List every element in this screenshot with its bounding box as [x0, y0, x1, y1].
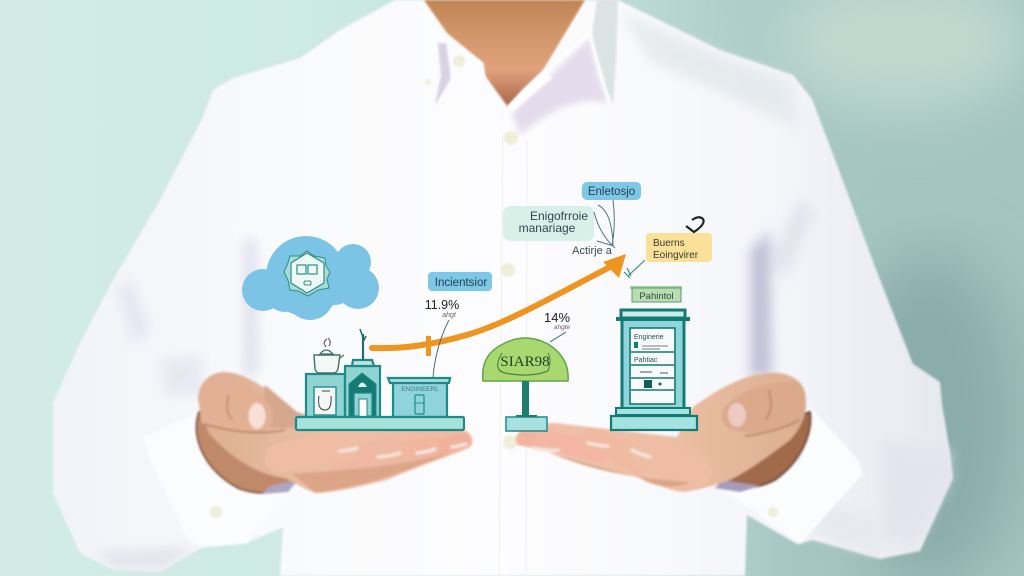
stat: 14%: ahgte	[554, 324, 571, 331]
box building	[388, 378, 450, 417]
label: Pahintol	[630, 286, 682, 302]
label: Buerns Eoingvirer: Eoingvirer	[653, 250, 699, 261]
connector lines	[594, 200, 615, 248]
stat: 11.9%	[425, 298, 459, 377]
shirt buttons	[210, 55, 778, 518]
stat: 11.9%: ahgt	[442, 312, 457, 319]
palm	[198, 372, 472, 493]
right hand	[515, 373, 810, 492]
label: Incientsior: Incientsior	[435, 277, 487, 289]
connector: yellow label	[624, 260, 645, 278]
thumbnail	[248, 403, 266, 429]
growth arrow	[372, 254, 626, 356]
label: Enletosjo: Enletosjo	[588, 186, 635, 198]
lower wrist	[196, 412, 296, 493]
cuff: right	[720, 404, 862, 544]
fingers	[280, 441, 464, 461]
palm	[515, 373, 806, 492]
lower wrist	[720, 412, 810, 488]
sign: SIAR98	[483, 338, 568, 431]
label: Incientsior	[428, 272, 492, 291]
label: Buerns Eoingvirer: Buerns	[653, 238, 685, 249]
label: Actirje a: Actirje a	[572, 245, 613, 257]
cloud with icon	[242, 236, 379, 320]
label: Pahintol: Pahintol	[639, 291, 674, 302]
platform	[296, 417, 464, 430]
neck	[424, 0, 585, 107]
icon: check mark	[686, 217, 704, 232]
tower panel: Pahtiac	[634, 357, 658, 364]
label: Enigofrroie manariage: Enigofrroie	[530, 209, 588, 223]
left hand	[196, 372, 472, 494]
cuff: left	[143, 413, 287, 547]
box building: ENGINEERL	[401, 386, 439, 393]
sign: SIAR98: SIAR98	[500, 354, 550, 370]
temple with spire	[345, 329, 380, 417]
label: Enletosjo	[582, 182, 641, 200]
stat: 11.9%: 11.9%	[425, 298, 459, 312]
stat: 14%: 14%	[544, 310, 570, 325]
icon: house in cloud	[284, 251, 330, 296]
collar	[435, 0, 618, 135]
placket line	[499, 108, 527, 576]
fingernails	[534, 443, 650, 457]
label: Enigofrroie manariage: manariage	[519, 221, 576, 235]
tower panel	[611, 310, 697, 430]
left building group	[296, 329, 464, 430]
stat: 14%	[544, 310, 571, 342]
fingers	[524, 438, 695, 472]
thumbnail	[728, 403, 746, 427]
tower panel: Enginerie	[634, 334, 664, 341]
thumb	[722, 382, 805, 432]
label: Buerns Eoingvirer	[646, 233, 712, 262]
label: Enigofrroie manariage	[503, 206, 594, 241]
fingernails	[340, 444, 466, 457]
thumb	[198, 374, 273, 431]
building with pot	[306, 338, 345, 417]
